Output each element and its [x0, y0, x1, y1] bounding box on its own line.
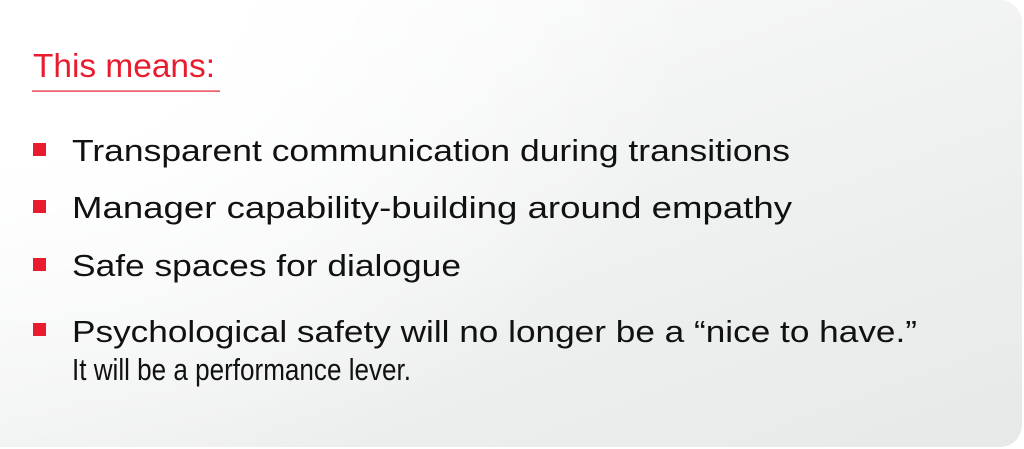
bullet 3: Safe spaces for dialogue [72, 248, 461, 283]
bullet 4: It will be a performance lever. [72, 352, 411, 387]
bullet list [33, 133, 917, 387]
bullet 1: Transparent communication during transitions [72, 133, 790, 168]
title: This means: [33, 47, 215, 84]
bullet 2: Manager capability-building around empathy [72, 190, 793, 225]
bullet 4: Psychological safety will no longer be a “nice to have.” [72, 314, 917, 349]
bullet 4 [33, 314, 917, 387]
